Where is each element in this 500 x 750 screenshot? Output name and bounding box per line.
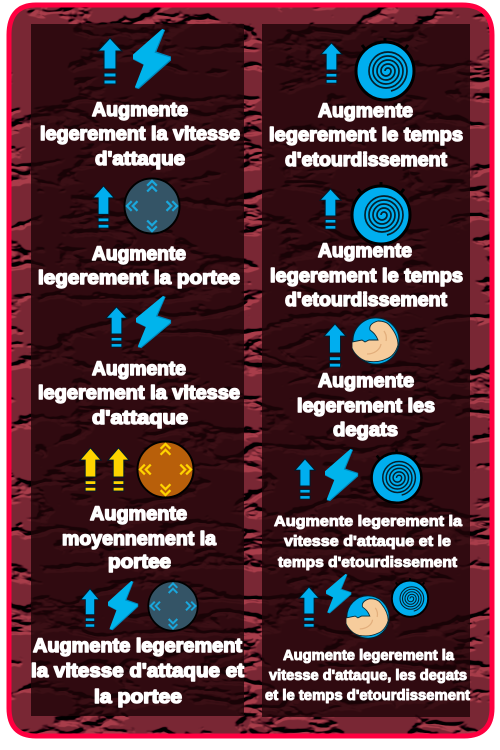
item: attack speed and stun time: Augmente legerement la — [274, 513, 463, 530]
item: stun time 2: d'etourdissement — [285, 290, 448, 311]
item: attack speed and stun time: temps d'etourdissement — [278, 554, 457, 571]
item: attack speed 2: legerement la vitesse — [38, 383, 240, 404]
item: attack speed 2: Augmente — [92, 359, 186, 380]
item: attack speed and stun time — [274, 449, 463, 571]
item: stun time — [269, 38, 463, 171]
item: medium range: moyennement la — [62, 529, 216, 550]
item: stun time: d'etourdissement — [285, 150, 448, 171]
item: medium range: Augmente — [90, 504, 187, 525]
item: stun time 2 — [270, 182, 463, 311]
item: stun time 2: Augmente — [318, 241, 412, 262]
item: damage: degats — [333, 420, 398, 441]
item: damage — [297, 318, 435, 441]
item: range: legerement la portee — [38, 268, 240, 289]
item: attack speed and range: la portee — [94, 687, 182, 708]
item: damage: legerement les — [297, 396, 435, 417]
item: attack speed — [40, 29, 240, 170]
item: attack speed, damage and stun time: Augmente legerement la — [283, 647, 455, 664]
item: attack speed and range — [31, 581, 245, 708]
item: damage: Augmente — [318, 371, 414, 392]
item: attack speed: legerement la vitesse — [40, 124, 240, 145]
item: attack speed 2: d'attaque — [92, 408, 188, 429]
item: attack speed, damage and stun time: et le temps d'etourdissement — [265, 687, 470, 704]
item: attack speed and range: la vitesse d'attaque et — [31, 661, 245, 682]
item: attack speed, damage and stun time — [265, 574, 470, 704]
item: range — [38, 178, 240, 289]
item: medium range — [62, 441, 216, 573]
item: attack speed: d'attaque — [95, 149, 185, 170]
item: attack speed and range: Augmente legerement — [33, 636, 243, 657]
item: attack speed 2 — [38, 296, 240, 429]
item: attack speed and stun time: vitesse d'attaque et le — [284, 533, 451, 550]
item: stun time 2: legerement le temps — [270, 266, 463, 287]
item: stun time: legerement le temps — [269, 125, 463, 146]
item: attack speed: Augmente — [92, 100, 188, 121]
item: medium range: portee — [108, 552, 171, 573]
item: range: Augmente — [92, 244, 186, 265]
item: stun time: Augmente — [318, 101, 413, 122]
panel: left column — [31, 24, 245, 716]
item: attack speed, damage and stun time: vitesse d'attaque, les degats — [269, 667, 467, 684]
panel: right column — [262, 24, 470, 717]
